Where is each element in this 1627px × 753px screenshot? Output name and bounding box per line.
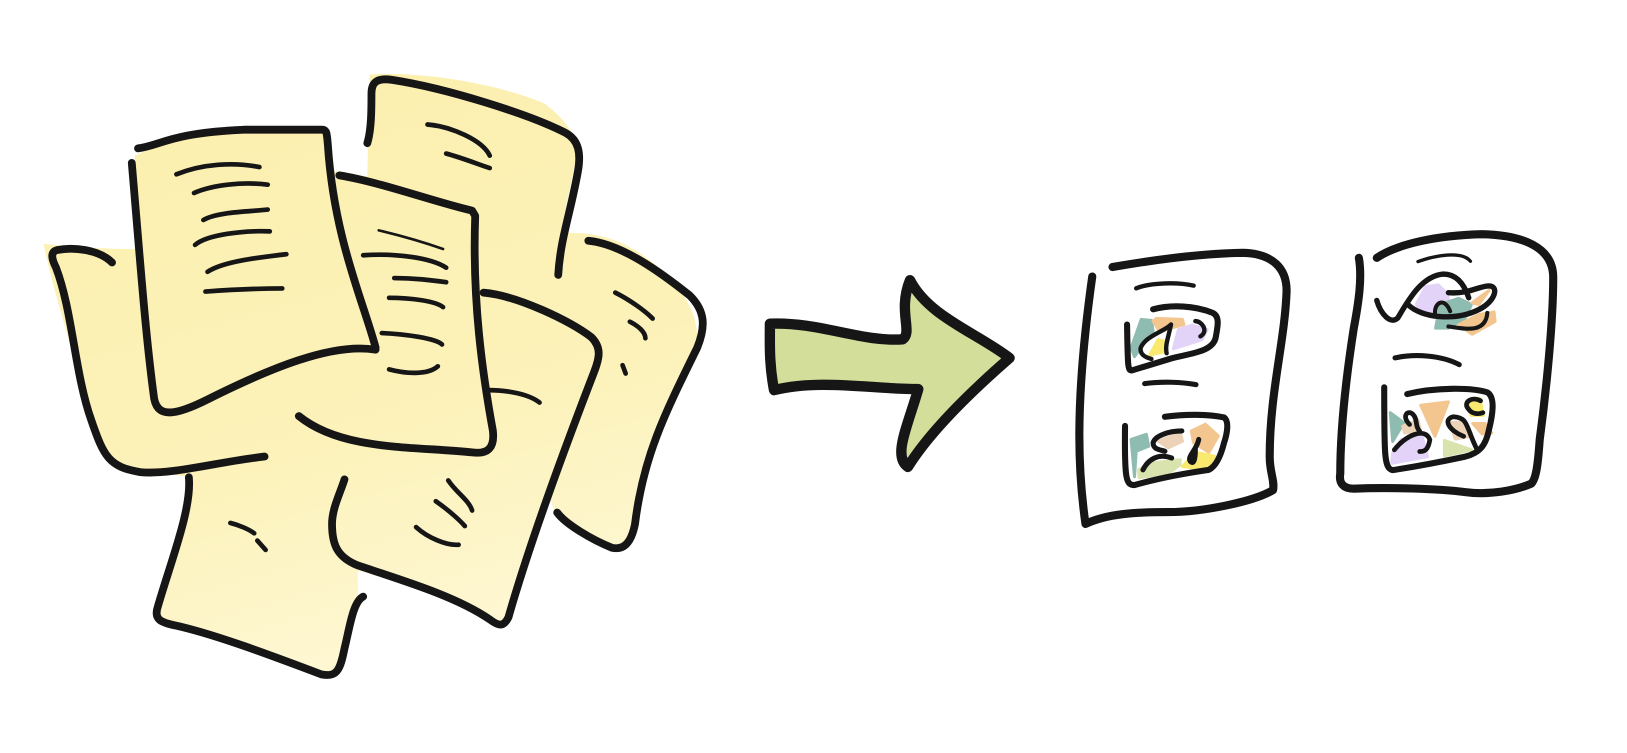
first picture colour patches (1416, 285, 1495, 334)
yellow watercolor wash (44, 74, 697, 677)
stack of yellow documents (44, 74, 703, 677)
page: first illustrated document (1079, 253, 1287, 524)
second picture colour patches (1390, 398, 1492, 463)
first picture colour patches (1131, 318, 1207, 357)
sheet: front middle (332, 293, 599, 625)
second picture colour patches (1131, 424, 1218, 478)
page: second illustrated document (1340, 234, 1553, 493)
page outline and pictures (1079, 253, 1287, 524)
arrow pointing right (770, 280, 1010, 467)
sheet: center (299, 175, 493, 453)
sheet: bottom (157, 477, 363, 675)
text lines on sheets (176, 125, 653, 550)
page outline and pictures (1340, 234, 1553, 493)
sheet: top left (132, 130, 376, 412)
sheet: far left (52, 249, 265, 473)
sheet: far right (557, 241, 703, 548)
sheet: top back (367, 79, 579, 275)
